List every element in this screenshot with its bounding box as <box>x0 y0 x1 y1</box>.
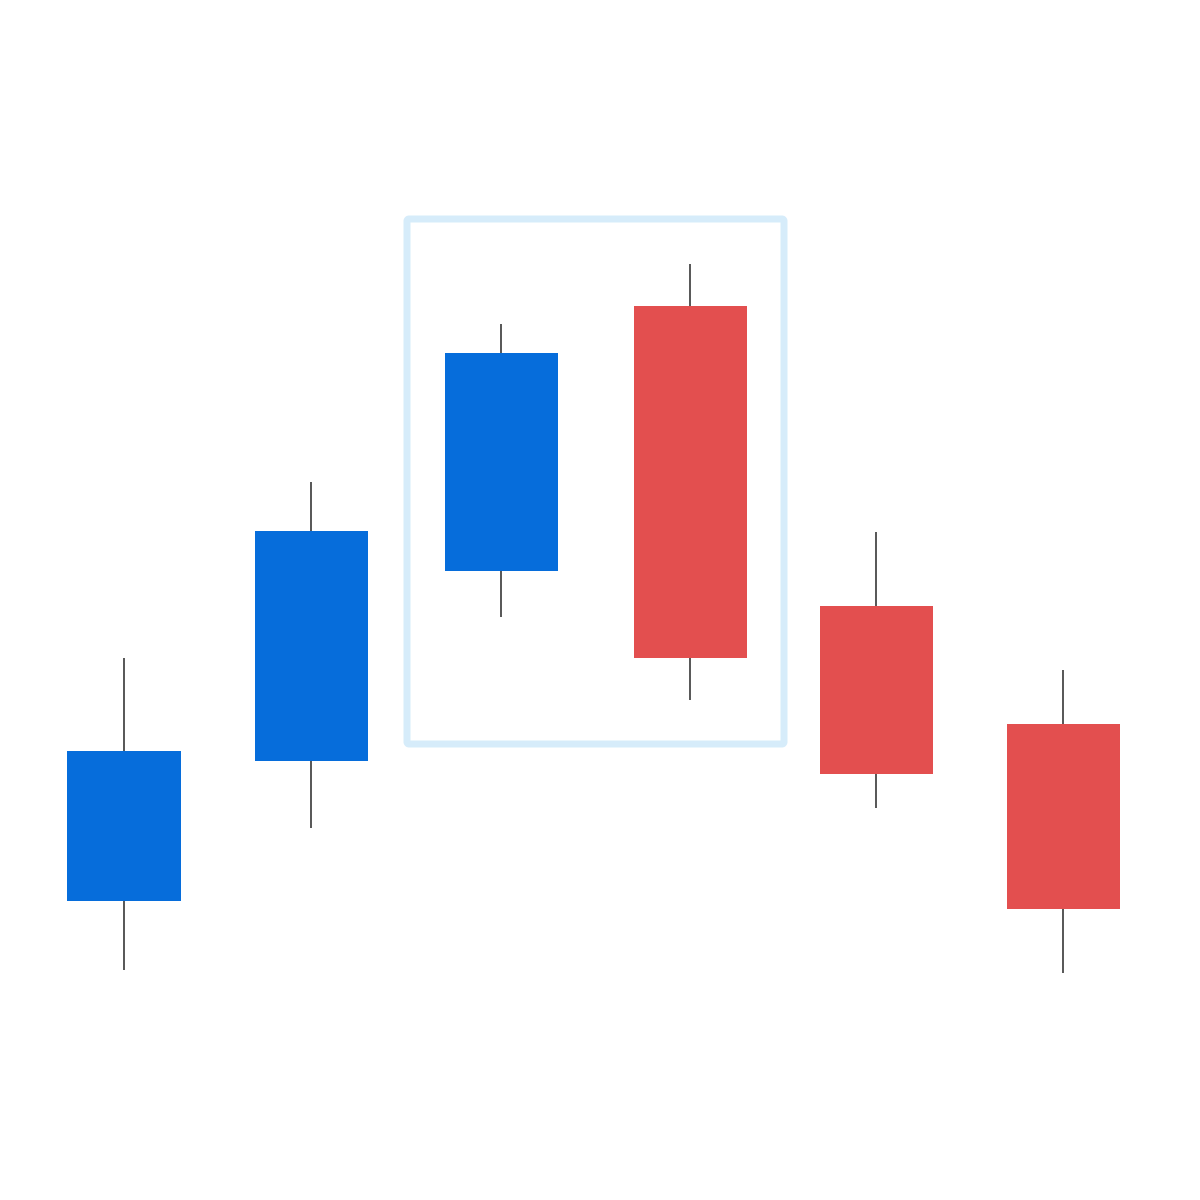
candle 2 bullish <box>255 482 368 828</box>
candle 3 bullish <box>445 324 558 617</box>
candle 6 bearish <box>1007 670 1120 973</box>
candle 5 bearish <box>820 532 933 808</box>
candle 1 bullish <box>67 658 181 970</box>
candle 4 bearish engulfing <box>634 264 747 700</box>
highlight box <box>407 219 784 744</box>
